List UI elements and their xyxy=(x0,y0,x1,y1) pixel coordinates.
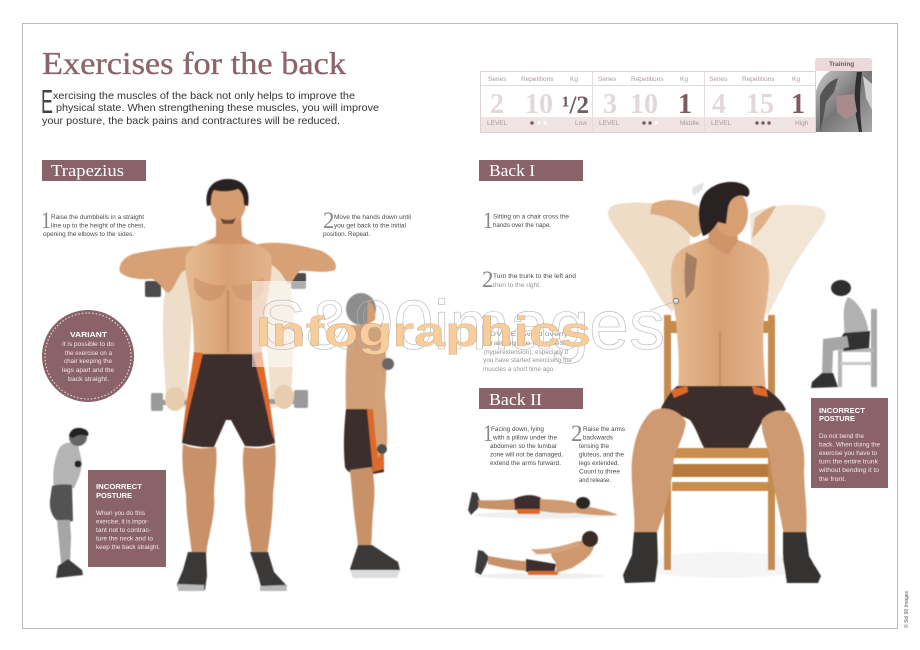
step 1 back I: 1 xyxy=(483,208,493,233)
level row: High xyxy=(795,120,809,127)
step 2 back II: backwards xyxy=(583,434,613,442)
training tab with back image xyxy=(815,58,872,132)
side standing man xyxy=(344,293,400,578)
shorts xyxy=(660,386,786,448)
step 1 back I: hands over the nape. xyxy=(493,222,551,229)
step 2 back I xyxy=(482,267,576,292)
incorrect posture box right: POSTURE xyxy=(819,414,855,423)
heading: Back II xyxy=(479,388,583,409)
table numbers: 3 xyxy=(603,89,617,120)
step 2 back II: tensing the xyxy=(579,443,609,450)
variant callout: VARIANT xyxy=(70,330,107,339)
raised dumbbells xyxy=(145,281,161,297)
incorrect posture box left: INCORRECT xyxy=(96,482,142,491)
level row xyxy=(487,120,809,127)
table headers: Repetitions xyxy=(521,76,554,83)
incorrect posture box right: Do not bend the xyxy=(819,433,864,440)
advice text: you have started exercising the xyxy=(483,357,572,364)
raised arms xyxy=(608,203,690,312)
intro text xyxy=(41,83,379,127)
intro text: E xyxy=(41,83,53,120)
title: Exercises for the back xyxy=(42,45,346,81)
step 2 trapezius xyxy=(323,208,411,238)
legs xyxy=(182,444,217,555)
torso xyxy=(185,236,272,358)
step 1 trapezius: line up to the height of the chest, xyxy=(51,222,145,230)
table headers: Series xyxy=(598,76,617,83)
advice text: ADVICE: Avoid overly xyxy=(484,331,569,338)
training table xyxy=(480,72,816,132)
step 2 back II: Count to three xyxy=(579,468,620,476)
heading: Back I xyxy=(479,160,583,181)
table numbers: 1 xyxy=(791,89,805,120)
small seated man xyxy=(811,280,877,388)
variant callout xyxy=(42,310,134,402)
step 2 back II: legs extended. xyxy=(579,460,619,467)
table numbers: 2 xyxy=(490,89,504,120)
step 1 trapezius xyxy=(41,208,145,238)
step 2 back II xyxy=(571,421,625,484)
table numbers: 10 xyxy=(630,89,658,120)
step 2 back I: 2 xyxy=(482,267,494,292)
heading: Trapezius xyxy=(42,160,146,181)
table headers: Series xyxy=(709,76,728,83)
level row: LEVEL xyxy=(599,120,620,127)
ghost hands xyxy=(165,387,185,411)
step 1 back II xyxy=(483,421,563,467)
incorrect posture box right: turn the entire trunk xyxy=(819,458,879,466)
front standing man xyxy=(120,179,336,591)
step 1 back II: with a pillow under the xyxy=(492,434,557,442)
step 1 back II: abdomen so the lumbar xyxy=(490,443,558,450)
table headers: Kg xyxy=(570,76,578,83)
shoes xyxy=(623,532,658,583)
table numbers: 15 xyxy=(746,89,774,120)
table numbers: 10 xyxy=(525,89,553,120)
step 1 back II: 1 xyxy=(483,421,493,446)
ghost lowered arms xyxy=(163,262,192,408)
neck and head xyxy=(206,214,252,244)
training tab with back image: Training xyxy=(829,61,854,68)
torso xyxy=(671,238,769,390)
step 2 trapezius: Move the hands down until xyxy=(334,214,411,221)
level row: LEVEL xyxy=(711,120,732,127)
incorrect posture box right xyxy=(811,398,888,488)
incorrect posture box right: exercise you have to xyxy=(819,450,877,457)
level row: LEVEL xyxy=(487,120,508,127)
seated man on chair xyxy=(608,182,826,583)
step 1 trapezius: Raise the dumbbells in a straight xyxy=(51,214,144,221)
table headers: Repetitions xyxy=(631,76,664,83)
step 2 trapezius: 2 xyxy=(323,208,334,233)
table numbers: 4 xyxy=(712,89,726,120)
incorrect posture small man xyxy=(50,428,88,578)
thighs and lower legs xyxy=(632,408,686,535)
advice text: straining the muscles xyxy=(484,340,564,347)
incorrect posture box right: without bending it to xyxy=(818,467,879,474)
level row: Middle xyxy=(680,120,700,127)
variant callout: back straight. xyxy=(68,376,109,383)
callout marker xyxy=(674,298,678,304)
raised arms xyxy=(120,246,200,293)
advice text xyxy=(483,331,572,373)
advice text: (hyperextension), especially if xyxy=(484,349,568,356)
incorrect posture box left xyxy=(88,470,166,567)
table headers: Repetitions xyxy=(742,76,775,83)
intro text: your posture, the back pains and contractures will be reduced. xyxy=(42,115,340,127)
watermark: S&90images xyxy=(258,286,665,364)
step 2 trapezius: you get back to the initial xyxy=(334,222,406,230)
variant callout: It is possible to do xyxy=(62,341,114,348)
incorrect posture box left: keep the back straight. xyxy=(96,544,160,551)
intro text: physical state. When strengthening these muscles, you will improve xyxy=(56,102,379,114)
table numbers xyxy=(490,89,805,120)
step 2 back I: Turn the trunk to the left and xyxy=(493,273,576,280)
intro text: xercising the muscles of the back not only helps to improve the xyxy=(53,90,355,102)
variant callout: legs apart and the xyxy=(62,367,114,374)
copyright note: © Sol 90 Images xyxy=(903,590,910,628)
shoes xyxy=(177,552,207,591)
watermark: Infographics xyxy=(256,308,591,355)
table headers: Kg xyxy=(680,76,688,83)
incorrect posture box right: the front. xyxy=(819,476,846,483)
lying man two xyxy=(475,531,605,579)
chair xyxy=(635,552,815,578)
incorrect posture box left: exercise, it is impor- xyxy=(96,518,149,526)
step 1 back II: Facing down, lying xyxy=(491,426,544,433)
heading: Back II: Back II xyxy=(489,390,542,409)
step 1 trapezius: opening the elbows to the sides. xyxy=(43,231,134,238)
step 2 back II: gluteus, and the xyxy=(579,452,624,458)
step 2 back I: then to the right. xyxy=(493,282,541,289)
variant callout: the exercise on a xyxy=(65,350,112,357)
table numbers: 1 xyxy=(678,89,692,120)
variant callout: chair keeping the xyxy=(64,358,112,365)
incorrect posture box left: ture the neck and to xyxy=(96,536,153,542)
incorrect posture box right: INCORRECT xyxy=(819,406,865,415)
advice text: muscles a short time ago. xyxy=(483,366,555,373)
heading: Back I: Back I xyxy=(489,161,535,180)
incorrect posture box left: POSTURE xyxy=(96,491,132,500)
table numbers: ¹/2 xyxy=(562,92,589,119)
lying man one xyxy=(468,492,618,518)
table headers: Kg xyxy=(792,76,800,83)
incorrect posture box right: back. When doing the xyxy=(819,442,880,448)
table headers: Series xyxy=(488,76,507,83)
incorrect posture box left: tant not to contrac- xyxy=(96,527,151,534)
step 1 back I xyxy=(483,208,569,233)
step 1 back II: extend the arms forward. xyxy=(490,460,561,467)
lowered dumbbells xyxy=(151,390,308,412)
table headers xyxy=(488,76,800,83)
step 1 back I: Sitting on a chair cross the xyxy=(493,214,569,220)
step 1 back II: zone will not be damaged, xyxy=(490,452,563,458)
step 1 trapezius: 1 xyxy=(41,208,51,233)
incorrect posture box left: When you do this xyxy=(96,510,145,517)
level row: Low xyxy=(575,120,587,127)
step 2 back II: Raise the arms xyxy=(583,426,625,433)
step 2 back II: 2 xyxy=(571,421,582,446)
step 2 back II: and release. xyxy=(579,477,611,484)
head xyxy=(708,215,738,255)
step 2 trapezius: position. Repeat. xyxy=(323,231,370,238)
shorts xyxy=(182,354,275,447)
heading: Trapezius: Trapezius xyxy=(51,161,124,180)
